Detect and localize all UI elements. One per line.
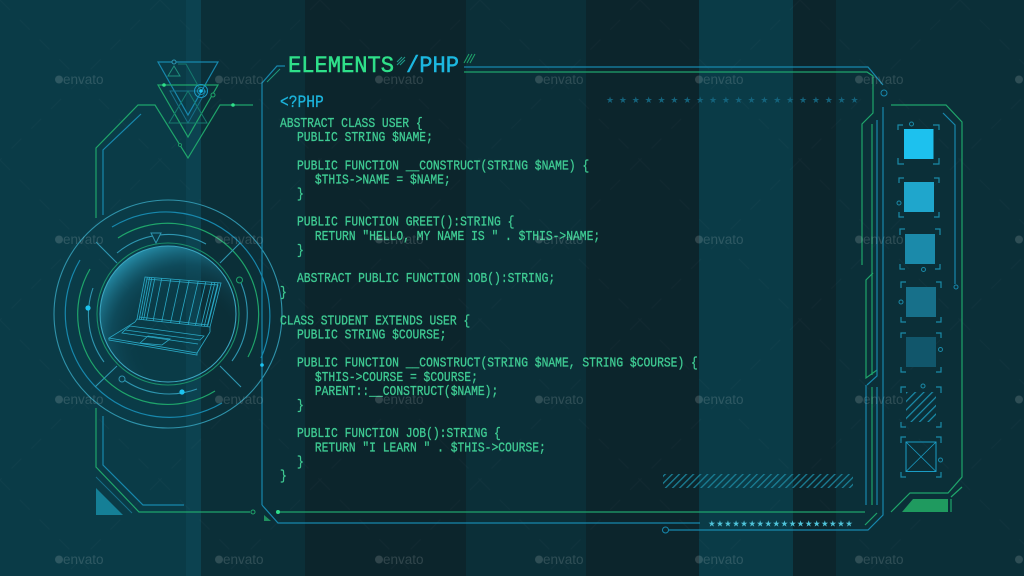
swatch 5 xyxy=(901,333,942,372)
watermarks: envato xyxy=(863,72,904,87)
watermarks: envato xyxy=(63,552,104,567)
watermarks: envato xyxy=(703,552,744,567)
watermarks: envato xyxy=(863,232,904,247)
class student: CLASS STUDENT EXTENDS USER { xyxy=(280,312,470,329)
watermarks: envato xyxy=(543,232,584,247)
watermarks: envato xyxy=(543,552,584,567)
watermarks: envato xyxy=(223,72,264,87)
swatch 3 xyxy=(900,229,940,272)
star row: bottom: ★★★★★★★★★★★★★★★★★★ xyxy=(708,520,853,530)
watermarks: envato xyxy=(383,392,424,407)
class user: PUBLIC FUNCTION GREET():STRING { xyxy=(297,214,514,230)
class student xyxy=(280,312,698,484)
swatch 2 xyxy=(897,178,939,217)
watermarks: envato xyxy=(383,72,424,87)
class student: PARENT::__CONSTRUCT($NAME); xyxy=(315,383,498,399)
class student: PUBLIC STRING $COURSE; xyxy=(297,326,446,343)
glass sphere xyxy=(100,246,236,382)
class student: } xyxy=(297,397,304,413)
class user: ABSTRACT CLASS USER { xyxy=(280,115,423,131)
watermarks: envato xyxy=(543,72,584,87)
watermarks: envato xyxy=(383,552,424,567)
class user: PUBLIC STRING $NAME; xyxy=(297,129,433,145)
class user: } xyxy=(297,185,304,202)
swatch 4 xyxy=(899,282,941,322)
class student: } xyxy=(280,467,287,484)
panel: right swatch column xyxy=(891,105,962,512)
watermarks: envato xyxy=(63,232,104,247)
class user: } xyxy=(280,284,287,301)
class student: } xyxy=(297,453,304,470)
class user: RETURN "HELLO, MY NAME IS " . $THIS->NAME; xyxy=(315,228,600,244)
watermarks: envato xyxy=(223,232,264,247)
swatch 7: crossed xyxy=(901,437,942,477)
heading: ELEMENTS /PHP: /PHP xyxy=(406,53,459,79)
heading: ELEMENTS /PHP xyxy=(288,53,475,79)
class user xyxy=(280,115,600,301)
watermarks: envato xyxy=(223,392,264,407)
star row: top: ★★★★★★★★★★★★★★★★★★★★ xyxy=(606,96,863,106)
watermarks: envato xyxy=(703,72,744,87)
watermarks: envato xyxy=(703,392,744,407)
diagonal ticks xyxy=(95,242,241,387)
watermarks: envato xyxy=(63,72,104,87)
swatch 6: hatched xyxy=(901,384,941,427)
panel: left lower circuit lines xyxy=(96,408,255,515)
panel: circular laptop gauge xyxy=(54,200,282,428)
class student: PUBLIC FUNCTION JOB():STRING { xyxy=(297,425,501,442)
blue arcs xyxy=(65,212,270,417)
heading: ELEMENTS /PHP: ELEMENTS xyxy=(288,53,394,79)
class user: ABSTRACT PUBLIC FUNCTION JOB():STRING; xyxy=(297,270,555,286)
panel: left upper circuit lines xyxy=(96,103,253,218)
php open tag: <?PHP xyxy=(280,92,324,112)
watermarks: envato xyxy=(863,392,904,407)
green arcs xyxy=(78,223,259,404)
watermarks: envato xyxy=(543,392,584,407)
icon: title hatch marks xyxy=(397,54,475,65)
class student: $THIS->COURSE = $COURSE; xyxy=(315,369,478,385)
inner arcs xyxy=(88,234,247,394)
class user: $THIS->NAME = $NAME; xyxy=(315,171,451,188)
watermarks: envato xyxy=(383,232,424,247)
watermarks: envato xyxy=(703,232,744,247)
swatch frame lines xyxy=(891,105,962,512)
panel: main code frame xyxy=(260,66,887,533)
icon: laptop xyxy=(109,277,221,355)
class user: PUBLIC FUNCTION __CONSTRUCT(STRING $NAME) { xyxy=(297,157,589,174)
green ring xyxy=(97,243,239,385)
watermarks: envato xyxy=(223,552,264,567)
arc markers xyxy=(85,233,243,395)
hatched bar xyxy=(663,474,853,488)
watermarks: envato xyxy=(863,552,904,567)
outer ring xyxy=(54,200,282,428)
class student: RETURN "I LEARN " . $THIS->COURSE; xyxy=(315,439,546,456)
class student: PUBLIC FUNCTION __CONSTRUCT(STRING $NAME, STRING $COURSE) { xyxy=(297,355,698,371)
class user: } xyxy=(297,242,304,258)
code block xyxy=(280,92,698,484)
watermarks: envato xyxy=(63,392,104,407)
panel: triangle emblem xyxy=(158,60,218,137)
swatch 1 xyxy=(898,122,939,164)
